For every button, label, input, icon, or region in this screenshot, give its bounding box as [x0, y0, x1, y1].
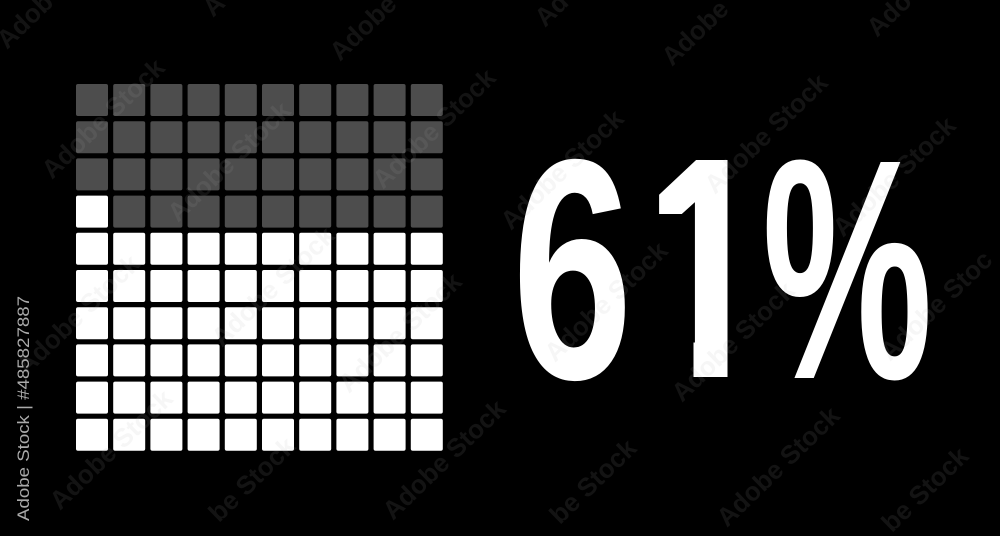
percentage figure: 61%: 6 [512, 95, 633, 445]
watermark: repeated Adobe Stock text: be Stock [875, 440, 975, 536]
watermark: repeated Adobe Stock text: Adobe Stock [494, 103, 630, 235]
watermark: repeated Adobe Stock text: Adobe Stock [35, 52, 171, 184]
watermark: repeated Adobe Stock text: be Stock [543, 432, 643, 530]
percentage figure: 61%: % [762, 94, 933, 446]
watermark: repeated Adobe Stock text: Adobe Stock [826, 110, 962, 242]
grey squares: remaining 39 [76, 84, 443, 228]
watermark: repeated Adobe Stock text: Adobe Stock [43, 383, 179, 515]
watermark: repeated Adobe Stock text: Adobe Stock [710, 400, 846, 532]
percentage figure: 61%: 1 [646, 94, 767, 444]
waffle chart: 61 of 100 squares filled [76, 84, 443, 451]
watermark: repeated Adobe Stock text: Adobe Stock [161, 95, 297, 227]
watermark: repeated Adobe Stock text: Adobe Stock [538, 235, 674, 367]
watermark: repeated Adobe Stock text: Adobe Stock [332, 266, 468, 398]
side credit: Adobe Stock id: Adobe Stock | #485827887 [14, 296, 33, 521]
watermark: repeated Adobe Stock text: be Stock [202, 430, 302, 528]
watermark: repeated Adobe Stock text: Adobe Stock [376, 393, 512, 525]
watermark: repeated Adobe Stock text: Adobe Stock [10, 248, 146, 380]
watermark: repeated Adobe Stock text: Adobe Stock [665, 275, 801, 407]
white squares: filled 61 [76, 196, 443, 451]
watermark: repeated Adobe Stock text: Adobe Stoc [873, 244, 998, 366]
watermark: repeated Adobe Stock text: Adobe Stock [366, 62, 502, 194]
percentage figure: 61% [520, 158, 928, 382]
watermark: repeated Adobe Stock text: Adobe Stock [205, 220, 341, 352]
watermark: repeated Adobe Stock text: Adobe Stock [698, 67, 834, 199]
